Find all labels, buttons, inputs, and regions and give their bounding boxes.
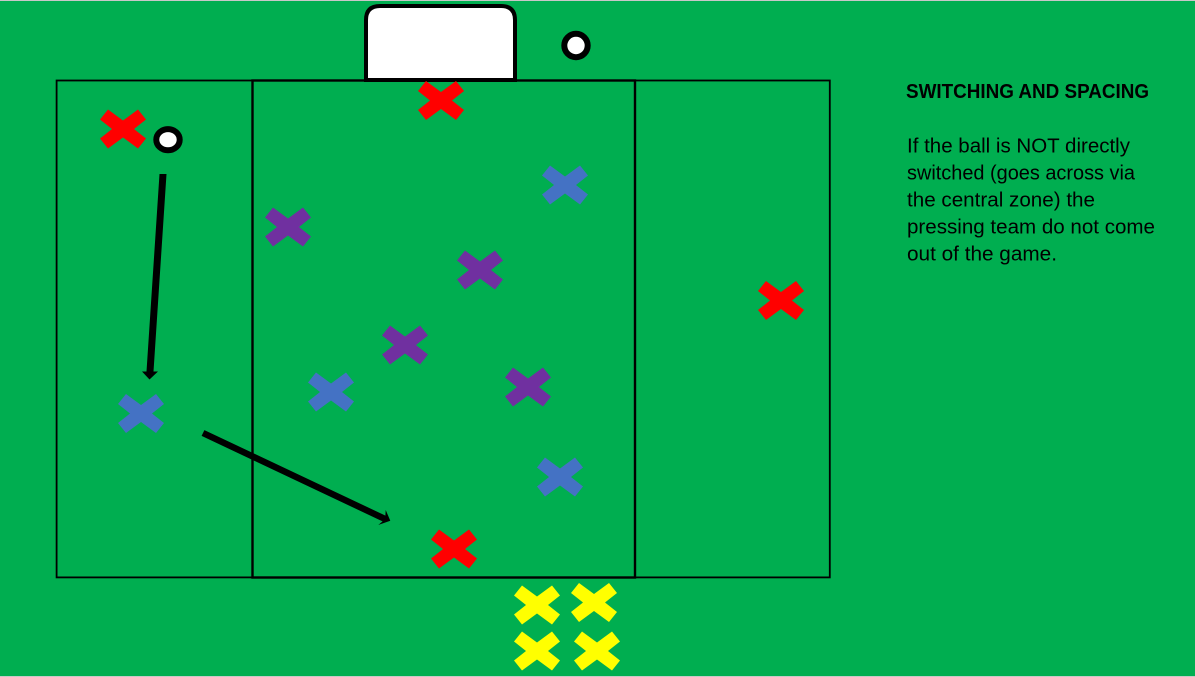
blue cross 3 xyxy=(308,372,354,412)
blue crosses xyxy=(118,166,588,496)
purple cross 2 xyxy=(457,250,503,290)
red cross 1 xyxy=(100,110,146,148)
yellow cross 2 xyxy=(571,583,617,622)
purple cross 4 xyxy=(505,368,551,406)
heading: SWITCHING AND SPACING xyxy=(906,81,1149,103)
pitch with zones xyxy=(57,80,830,578)
description text: the central zone) the xyxy=(907,190,1095,212)
description text: switched (goes across via xyxy=(907,162,1136,184)
yellow cross 3 xyxy=(514,632,560,670)
yellow cross 4 xyxy=(574,632,620,670)
purple cross 3 xyxy=(382,326,428,364)
yellow cross 1 xyxy=(514,586,560,624)
blue cross 2 xyxy=(118,394,164,433)
description text: pressing team do not come xyxy=(907,216,1155,238)
yellow crosses xyxy=(514,583,620,670)
purple crosses xyxy=(265,208,551,406)
red cross 4 xyxy=(431,530,477,568)
purple cross 1 xyxy=(265,208,311,246)
red cross 2 xyxy=(418,81,464,120)
arrow: down the left zone xyxy=(142,174,166,380)
blue cross 4 xyxy=(537,458,583,496)
description text: out of the game. xyxy=(907,244,1057,266)
red cross 3 xyxy=(758,281,804,320)
description text xyxy=(907,136,1155,266)
ball: left zone xyxy=(156,129,180,150)
red crosses xyxy=(100,81,804,568)
arrow: pass into central zone xyxy=(202,430,390,525)
ball: top right of goal xyxy=(564,34,588,57)
blue cross 1 xyxy=(542,166,588,204)
description text: If the ball is NOT directly xyxy=(907,136,1130,158)
goal xyxy=(366,6,515,80)
